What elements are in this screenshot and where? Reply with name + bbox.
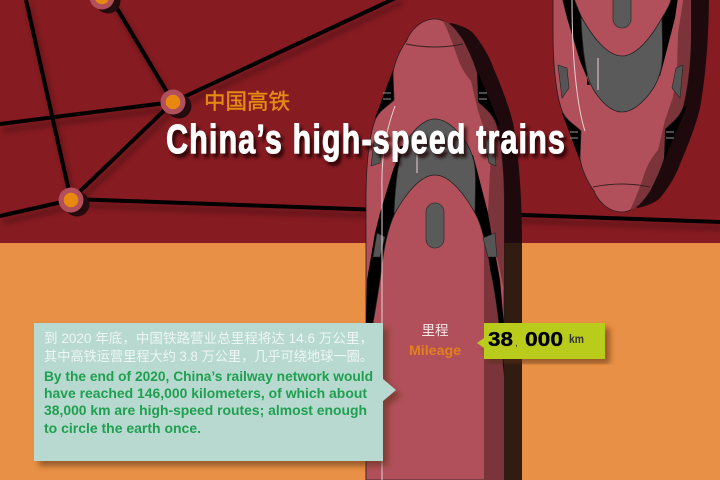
title: China’s high-speed trains (166, 116, 566, 162)
train shadow on orange (500, 243, 522, 480)
bogie black (375, 70, 500, 125)
english paragraph: By the end of 2020, China’s railway network would (44, 368, 373, 384)
network node: top (90, 0, 120, 14)
label: mileage (409, 323, 462, 358)
train shadow on red (440, 23, 522, 243)
chinese paragraph: 其中高铁运营里程大约 3.8 万公里，几乎可绕地球一圈。 (44, 348, 373, 364)
roof slot (426, 203, 444, 248)
lower side shade strip (488, 170, 504, 290)
chinese paragraph: 到 2020 年底，中国铁路营业总里程将达 14.6 万公里， (44, 331, 373, 346)
chinese paragraph (44, 331, 373, 364)
train: upper right, heading down (553, 0, 709, 212)
network node: centre (160, 90, 192, 118)
rail network lines (0, 0, 720, 222)
label: mileage: 里程 (422, 323, 448, 338)
inner nose and body panel (366, 175, 504, 480)
train: main, heading up (366, 19, 522, 480)
callout box (34, 323, 396, 461)
chinese heading: 中国高铁 (204, 90, 290, 114)
background: orange lower area (0, 243, 720, 480)
value tag: 38,000 km (477, 323, 605, 359)
background: red upper area (0, 0, 720, 243)
value tag: 38,000 km: , (515, 338, 518, 349)
english paragraph: 38,000 km are high-speed routes; almost enough (44, 402, 367, 418)
english paragraph: have reached 146,000 kilometers, of which about (44, 385, 367, 401)
windscreen (394, 119, 476, 213)
english paragraph (44, 368, 373, 436)
label: mileage: Mileage (409, 343, 462, 358)
value tag: 38,000 km: 000 (525, 329, 563, 351)
side vents (371, 133, 497, 257)
nose cap line (406, 44, 463, 47)
bogie vents (383, 93, 487, 99)
inner panel shade (484, 240, 504, 480)
windscreen black bands (366, 146, 504, 380)
network node: lower left (58, 188, 90, 216)
train side shade (443, 21, 504, 280)
value tag: 38,000 km: km (569, 332, 584, 346)
callout: intro text (34, 323, 396, 461)
train body (366, 19, 504, 480)
english paragraph: to circle the earth once. (44, 420, 201, 436)
highlights (382, 106, 417, 480)
value tag: 38,000 km: 38 (488, 329, 513, 351)
